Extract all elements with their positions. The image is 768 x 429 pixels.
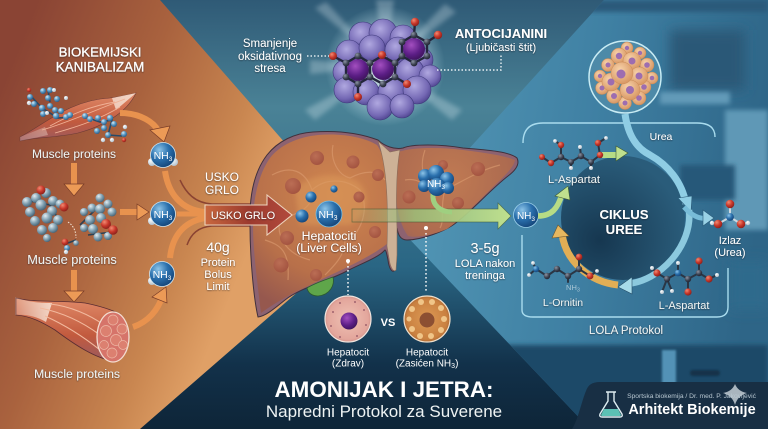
heading: biochemical cannibalism: BIOKEMIJSKI	[59, 44, 141, 60]
heading: anthocyanins: ANTOCIJANINI	[455, 26, 547, 41]
icon: NH3 cloud in liver: 3	[441, 184, 445, 191]
text: brand name: Arhitekt Biokemije	[628, 402, 756, 418]
arrow: yellow ornithine arc	[552, 225, 618, 285]
label: 40g protein bolus limit: Protein	[201, 257, 235, 269]
label: LOLA protocol: LOLA Protokol	[589, 325, 663, 337]
label: output urea: Izlaz	[719, 235, 741, 247]
label: LOLA dose: treninga	[465, 270, 506, 282]
label: muscle proteins 1: Muscle proteins	[32, 147, 116, 161]
icon: ammonia-saturated hepatocyte	[404, 296, 450, 342]
molecule: L-Aspartate lower	[650, 257, 719, 296]
icon: sparkle	[723, 384, 747, 405]
icon: NH3 cloud in liver	[418, 165, 454, 196]
text: oxidative stress reduction	[238, 38, 302, 75]
label: urea: Urea	[650, 131, 673, 143]
text: brand line: Sportska biokemija / Dr. med. P. Jakovljević	[627, 393, 757, 400]
label: 40g protein bolus limit: Limit	[206, 281, 230, 293]
panel: brand logo	[572, 382, 768, 429]
panel: LOLA protocol bracket	[522, 123, 728, 317]
heading: biochemical cannibalism: KANIBALIZAM	[56, 60, 144, 74]
arrows: orange protein to ammonia flows	[64, 113, 170, 327]
label: muscle proteins 2: Muscle proteins	[27, 252, 117, 267]
icon: NH3 node 1: 3	[169, 156, 173, 163]
arrows: convergence into bottleneck	[165, 171, 252, 258]
label: hepatocytes	[296, 229, 362, 255]
label: cycle of urea: UREE	[606, 222, 643, 237]
label: saturated hepatocyte: (Zasićen NH	[396, 358, 451, 370]
icon: NH3 node entering urea cycle: NH	[517, 211, 531, 222]
label: saturated hepatocyte: Hepatocit	[406, 348, 448, 358]
background: right blurred lab panel	[398, 0, 768, 429]
label: 40g protein bolus limit	[201, 239, 235, 293]
label: hepatocytes: Hepatociti	[302, 229, 356, 243]
label: 40g protein bolus limit: 40g	[206, 239, 230, 255]
text: oxidative stress reduction: oksidativnog	[238, 51, 302, 63]
label: cycle of urea	[599, 207, 649, 237]
illustration: liver	[250, 131, 518, 317]
icon: spheroid hepatocyte cluster	[589, 41, 661, 113]
molecule: L-Aspartate top	[539, 136, 608, 170]
label: L-Ornitin: L-Ornitin	[543, 297, 583, 309]
icon: healthy hepatocyte	[325, 296, 371, 342]
leader: oxidative stress dotted line	[307, 55, 329, 57]
arrow: blue urea stream	[625, 114, 692, 212]
label: 40g protein bolus limit: Bolus	[204, 269, 232, 281]
label: LOLA dose	[455, 241, 515, 282]
label: output urea: (Urea)	[714, 247, 746, 259]
molecule: L-Ornithine: NH	[566, 283, 577, 292]
label: muscle proteins 3: Muscle proteins	[34, 367, 120, 381]
icon: NH3 node 3	[148, 262, 174, 286]
molecule: L-Ornithine	[527, 254, 599, 294]
label: bottleneck	[205, 170, 239, 197]
label: cycle of urea: CIKLUS	[599, 207, 649, 222]
arrow: usko grlo red bottleneck	[205, 195, 292, 235]
label: VS: VS	[381, 317, 395, 329]
icon: NH3 node 2: 3	[169, 215, 173, 222]
text: oxidative stress reduction: Smanjenje	[243, 38, 297, 50]
label: L-Aspartat lower: L-Aspartat	[659, 300, 709, 312]
label: LOLA dose: LOLA nakon	[455, 258, 515, 270]
icon: NH3 node 1: NH	[154, 150, 169, 162]
label: L-Aspartat top: L-Aspartat	[548, 174, 601, 186]
label: bottleneck: USKO	[205, 170, 239, 184]
label: saturated hepatocyte: 3	[451, 363, 455, 370]
leader: anthocyanin dotted line	[437, 55, 501, 70]
icon: NH3 node entering urea cycle	[514, 202, 538, 228]
heading: biochemical cannibalism	[56, 44, 144, 74]
icon: NH3 node 2	[148, 202, 176, 226]
icon: NH3 node 3: NH	[153, 269, 168, 281]
icon: anthocyanin molecule cluster	[305, 0, 462, 126]
icon: muscle cross-section	[15, 297, 129, 362]
title: AMONIJAK I JETRA:	[275, 377, 493, 402]
label: LOLA dose: 3-5g	[470, 241, 500, 257]
icon: NH3 node entering urea cycle: 3	[531, 216, 535, 223]
icon: NH3 node 1	[148, 142, 178, 168]
icon: NH3 with bubbles in hepatocytes: NH	[318, 209, 334, 221]
icon: flask	[600, 392, 622, 417]
icon: NH3 node 2: NH	[154, 209, 169, 221]
label: healthy hepatocyte: (Zdrav)	[332, 358, 364, 370]
arrow: blue ring to L-Aspartat and output	[618, 207, 714, 294]
label: hepatocytes: (Liver Cells)	[296, 241, 362, 255]
icon: NH3 node 3: 3	[168, 275, 172, 282]
heading: anthocyanins: (Ljubičasti štit)	[466, 42, 536, 54]
icon: protein clumps	[22, 186, 118, 254]
heading: anthocyanins	[455, 26, 547, 54]
label: saturated hepatocyte	[396, 348, 458, 370]
label: healthy hepatocyte	[327, 348, 369, 370]
arrow: green into cycle	[538, 146, 628, 216]
icon: NH3 with bubbles in hepatocytes	[296, 185, 342, 227]
leaders: dotted lines to hepatocyte cells	[348, 233, 426, 295]
molecule: urea output	[710, 200, 750, 228]
label: output urea	[714, 235, 746, 259]
label: healthy hepatocyte: Hepatocit	[327, 348, 369, 358]
label: saturated hepatocyte: )	[455, 358, 458, 370]
label: bottleneck: GRLO	[205, 183, 239, 197]
icon: NH3 with bubbles in hepatocytes: 3	[334, 215, 338, 222]
arrow: green ammonia transport	[352, 194, 511, 229]
icon: muscle fibre with protein chains	[20, 87, 136, 142]
icon: NH3 cloud in liver: NH	[427, 179, 441, 190]
molecule: L-Ornithine: 3	[577, 288, 580, 294]
icon: urea cycle core circle	[561, 156, 685, 280]
text: oxidative stress reduction: stresa	[254, 63, 286, 75]
arrow: usko grlo red bottleneck: USKO GRLO	[211, 210, 275, 222]
subtitle: Napredni Protokol za Suverene	[266, 402, 502, 421]
background: left orange panel	[0, 0, 300, 429]
